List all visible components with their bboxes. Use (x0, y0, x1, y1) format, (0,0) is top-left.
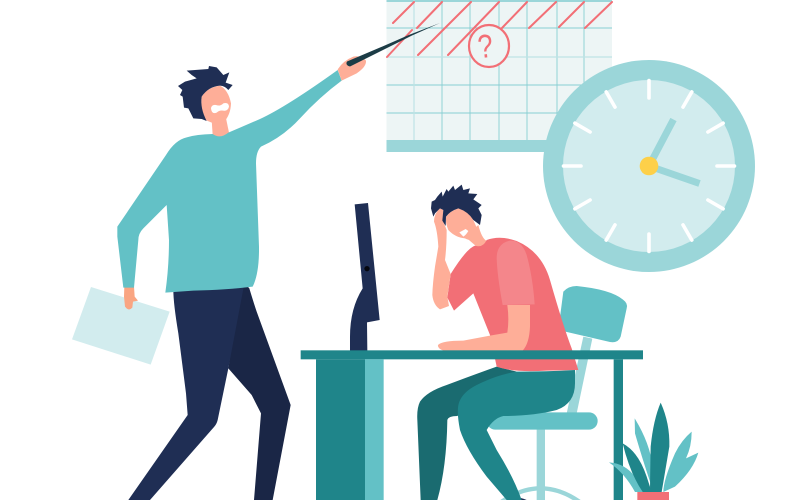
clock hands (649, 120, 700, 184)
clock tick marks (564, 80, 734, 252)
forearm on desk (438, 305, 530, 351)
arm holding head (432, 208, 451, 309)
sheet of paper (72, 287, 170, 365)
office chair (487, 286, 627, 500)
back leg (417, 367, 517, 500)
desk monitor (350, 203, 380, 351)
shirt sleeve highlight (497, 241, 535, 305)
raised hand (338, 56, 366, 81)
wall clock (543, 60, 755, 272)
calendar (386, 0, 612, 152)
shirt (447, 238, 578, 371)
plant pot (637, 492, 669, 500)
trousers (128, 280, 291, 500)
mouth (211, 103, 229, 113)
hair (431, 185, 482, 226)
desk (301, 350, 643, 500)
seated stressed man (417, 185, 578, 500)
neck (212, 117, 229, 137)
clock centre pin (640, 157, 658, 175)
circled question mark: ? (476, 28, 495, 66)
neck (465, 225, 487, 247)
face (446, 208, 480, 240)
pointer stick (346, 23, 440, 66)
sweater (117, 70, 342, 293)
face (201, 86, 231, 123)
front leg (458, 370, 575, 500)
chair base (502, 488, 579, 500)
mouth (459, 229, 468, 237)
chair backrest (558, 286, 627, 342)
shoe (509, 497, 527, 500)
potted plant (609, 403, 698, 500)
calendar crossed-out days (387, 2, 612, 57)
circled question mark (469, 25, 509, 67)
hair (178, 66, 233, 121)
chair seat (487, 412, 598, 430)
lower hand (124, 287, 138, 309)
standing man pointing at the calendar (72, 23, 440, 500)
